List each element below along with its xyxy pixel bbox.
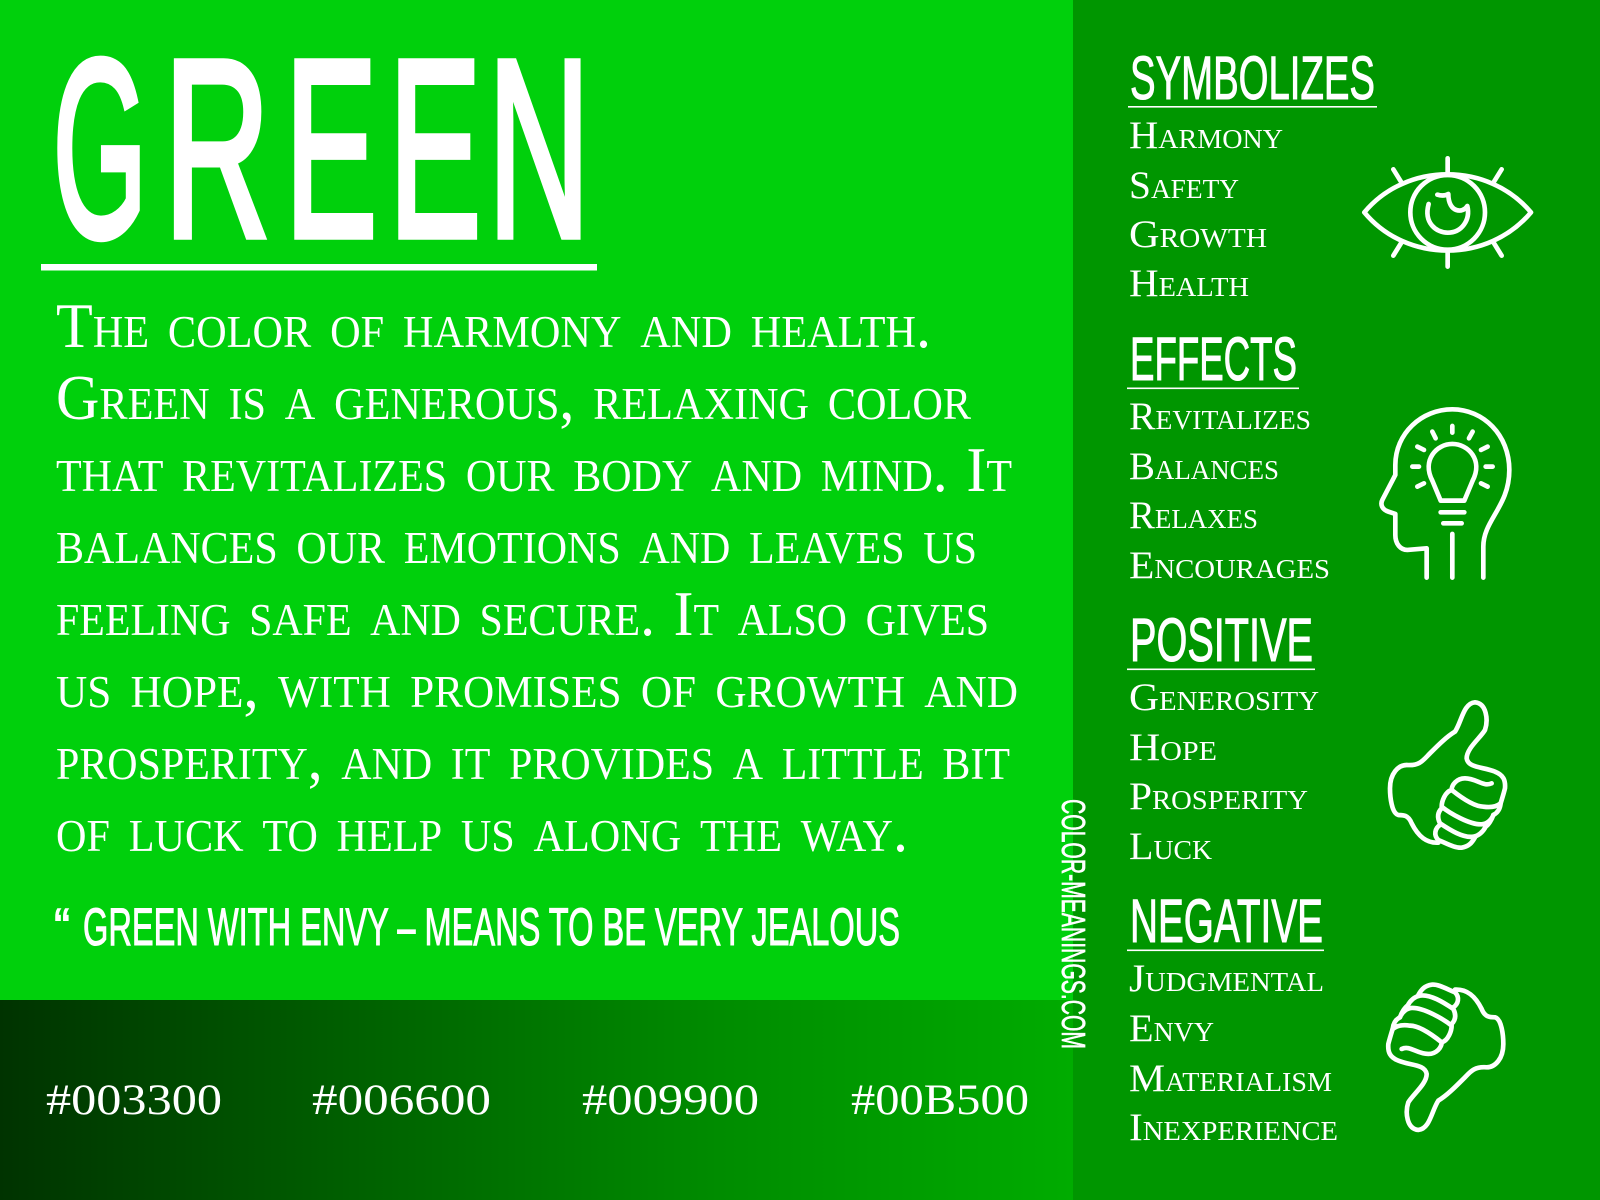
heading: negative: NEGATIVE <box>1130 887 1323 955</box>
text block: description: that revitalizes our body and mind. It <box>56 434 1012 505</box>
hex codes: #003300 <box>46 1077 222 1124</box>
list: symbolizes: Growth <box>1129 213 1267 256</box>
text block: description <box>56 290 1018 865</box>
panel: positive <box>1127 606 1319 868</box>
list: positive: Luck <box>1129 825 1212 868</box>
list: effects <box>1129 395 1330 587</box>
icon: thumbs down <box>1388 985 1503 1130</box>
list: negative: Judgmental <box>1129 957 1324 1000</box>
quote <box>54 898 900 957</box>
list: effects: Relaxes <box>1129 494 1258 537</box>
panel: symbolizes <box>1128 44 1377 305</box>
panel: color swatch gradient bar <box>0 1000 1073 1200</box>
title: E <box>389 7 481 290</box>
title underline <box>41 264 597 270</box>
text block: description: of luck to help us along the way. <box>56 794 908 865</box>
list: positive: Generosity <box>1129 676 1319 719</box>
title: R <box>164 7 270 290</box>
text block: description: Green is a generous, relaxing color <box>56 362 971 433</box>
list: positive: Prosperity <box>1129 775 1308 818</box>
title: N <box>488 7 590 290</box>
quote: GREEN WITH ENVY – MEANS TO BE VERY JEALOUS <box>83 898 900 957</box>
background: main panel <box>0 0 1074 1000</box>
list: effects: Revitalizes <box>1129 395 1311 438</box>
title: G <box>53 7 147 290</box>
text block: description: us hope, with promises of growth and <box>56 650 1018 721</box>
hex codes: #006600 <box>312 1077 491 1124</box>
hex codes: #00B500 <box>851 1077 1029 1124</box>
panel: effects <box>1127 325 1330 587</box>
text block: description: prosperity, and it provides a little bit <box>56 722 1010 793</box>
hex codes <box>46 1077 1029 1124</box>
list: negative: Inexperience <box>1129 1106 1338 1149</box>
list: negative: Materialism <box>1129 1057 1332 1100</box>
list: effects: Encourages <box>1129 544 1330 587</box>
list: effects: Balances <box>1129 445 1279 488</box>
title <box>53 7 590 290</box>
list: symbolizes <box>1129 114 1283 305</box>
panel: negative <box>1127 887 1338 1149</box>
heading: positive: POSITIVE <box>1130 606 1313 674</box>
heading: effects: EFFECTS <box>1130 325 1297 393</box>
icon: head with light bulb <box>1381 409 1509 578</box>
site credit: COLOR-MEANINGS.COM <box>1055 799 1092 1049</box>
heading: symbolizes: SYMBOLIZES <box>1130 44 1375 112</box>
hex codes: #009900 <box>582 1077 759 1124</box>
text block: description: The color of harmony and health. <box>56 290 931 361</box>
panel: sidebar <box>1073 0 1600 1200</box>
quote: “ <box>54 898 70 957</box>
list: symbolizes: Safety <box>1129 164 1239 207</box>
list: negative: Envy <box>1129 1007 1214 1050</box>
icon: thumbs up <box>1390 702 1505 848</box>
list: negative <box>1129 957 1338 1149</box>
icon: eye <box>1364 158 1531 267</box>
list: symbolizes: Health <box>1129 262 1249 305</box>
text block: description: feeling safe and secure. It also gives <box>56 578 989 649</box>
text block: description: balances our emotions and leaves us <box>56 506 977 577</box>
list: positive: Hope <box>1129 726 1217 769</box>
list: symbolizes: Harmony <box>1129 114 1283 157</box>
title: E <box>285 7 377 290</box>
list: positive <box>1129 676 1319 868</box>
